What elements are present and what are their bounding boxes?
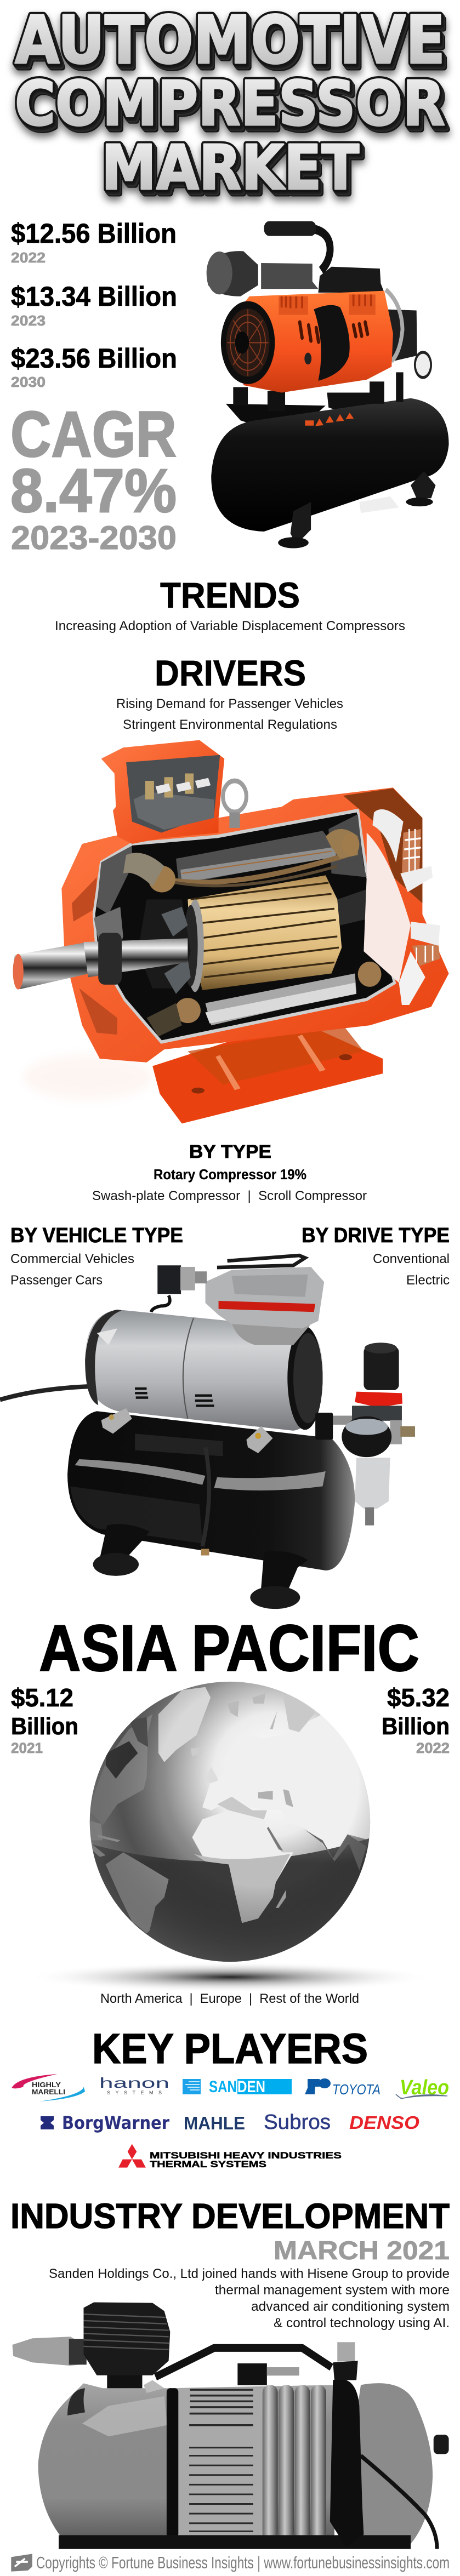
market values and CAGR: 2023 xyxy=(11,312,46,329)
icon: fortune business insights logo xyxy=(11,2554,32,2572)
logo: hanon systems: SYSTEMS xyxy=(107,2090,162,2095)
heading: drivers: DRIVERS xyxy=(155,653,306,693)
logo: toyota xyxy=(305,2078,381,2098)
other regions: North America | Europe | Rest of the World xyxy=(100,1991,359,2006)
image: electric motor cutaway xyxy=(13,740,449,1123)
market values and CAGR: 2023-2030 xyxy=(11,519,177,556)
value 2022: Billion xyxy=(382,1713,450,1740)
logo: hanon systems xyxy=(99,2075,169,2095)
by vehicle type segment xyxy=(10,1224,183,1288)
by type segment: BY TYPE xyxy=(189,1141,271,1162)
heading: industry development: INDUSTRY DEVELOPMENT xyxy=(10,2196,450,2236)
value 2021: Billion xyxy=(11,1713,78,1740)
value 2022 xyxy=(382,1683,450,1756)
logo: mitsubishi: MITSUBISHI HEAVY INDUSTRIES xyxy=(150,2151,342,2161)
by drive type segment: Conventional xyxy=(373,1252,450,1266)
value 2021: 2021 xyxy=(11,1740,43,1756)
heading: trends xyxy=(55,575,405,633)
value 2022: $5.32 xyxy=(387,1683,450,1712)
logo: hanon systems: hanon xyxy=(99,2075,169,2091)
by vehicle type segment: Passenger Cars xyxy=(10,1273,103,1288)
logo: highly marelli: MARELLI xyxy=(32,2088,65,2096)
image: orange air compressor xyxy=(207,221,449,548)
logo: sanden: SAN xyxy=(209,2078,237,2096)
image: silver air compressor xyxy=(0,1255,415,1609)
market values and CAGR: 8.47% xyxy=(10,456,177,525)
logo: toyota: TOYOTA xyxy=(332,2081,381,2098)
heading: drivers: Rising Demand for Passenger Vehicles xyxy=(116,696,343,711)
logo: borgwarner: BorgWarner xyxy=(62,2112,169,2133)
logo: highly marelli xyxy=(12,2074,85,2101)
key player logos xyxy=(12,2074,449,2169)
market values and CAGR: 2022 xyxy=(11,249,46,266)
logo: mahle: MAHLE xyxy=(184,2113,245,2133)
heading: trends: TRENDS xyxy=(160,575,300,615)
market values and CAGR: CAGR xyxy=(10,398,177,471)
value 2021 xyxy=(11,1683,78,1756)
title: MARKET xyxy=(101,133,359,204)
heading: drivers: Stringent Environmental Regulations xyxy=(123,717,337,732)
market values and CAGR: 2030 xyxy=(11,374,46,390)
globe shadow xyxy=(27,1962,433,1992)
development text xyxy=(49,2266,450,2331)
by drive type segment xyxy=(302,1224,450,1288)
heading: trends: Increasing Adoption of Variable Displacement Compressors xyxy=(55,619,405,633)
market values and CAGR: $12.56 Billion xyxy=(11,218,177,249)
heading: asia pacific: ASIA PACIFIC xyxy=(39,1612,419,1685)
title xyxy=(15,3,445,204)
logo: subros: Subros xyxy=(264,2111,331,2134)
by type segment: Rotary Compressor 19% xyxy=(154,1166,306,1183)
market values and CAGR xyxy=(10,218,177,556)
logo: denso: DENSO xyxy=(349,2112,419,2133)
by drive type segment: Electric xyxy=(406,1273,450,1288)
value 2022: 2022 xyxy=(416,1740,450,1756)
title: MARKET xyxy=(101,133,359,204)
by drive type segment: BY DRIVE TYPE xyxy=(302,1224,450,1247)
heading: drivers xyxy=(116,653,343,732)
heading: key players: KEY PLAYERS xyxy=(92,2025,368,2072)
logo: sanden: DEN xyxy=(237,2078,265,2096)
by type segment xyxy=(92,1141,367,1203)
development text: Sanden Holdings Co., Ltd joined hands with Hisene Group to provide xyxy=(49,2266,450,2281)
icon: globe xyxy=(88,1682,381,1967)
development text: thermal management system with more xyxy=(215,2283,450,2298)
development text: advanced air conditioning system xyxy=(251,2299,450,2314)
logo: highly marelli: HIGHLY xyxy=(32,2081,61,2089)
by vehicle type segment: Commercial Vehicles xyxy=(10,1252,134,1266)
market values and CAGR: $13.34 Billion xyxy=(11,281,177,312)
value 2021: $5.12 xyxy=(11,1683,73,1712)
image: grey compressor xyxy=(12,2302,449,2551)
heading: industry development: MARCH 2021 xyxy=(274,2236,450,2265)
market values and CAGR: $23.56 Billion xyxy=(11,343,177,374)
logo: mitsubishi: THERMAL SYSTEMS xyxy=(150,2160,266,2169)
by vehicle type segment: BY VEHICLE TYPE xyxy=(10,1224,183,1247)
logo: mitsubishi xyxy=(118,2144,342,2169)
development text: & control technology using AI. xyxy=(274,2316,450,2331)
by type segment: Swash-plate Compressor | Scroll Compressor xyxy=(92,1189,367,1203)
heading: industry development xyxy=(10,2196,450,2265)
logo: sanden xyxy=(183,2078,292,2096)
logo: valeo: Valeo xyxy=(400,2076,449,2099)
